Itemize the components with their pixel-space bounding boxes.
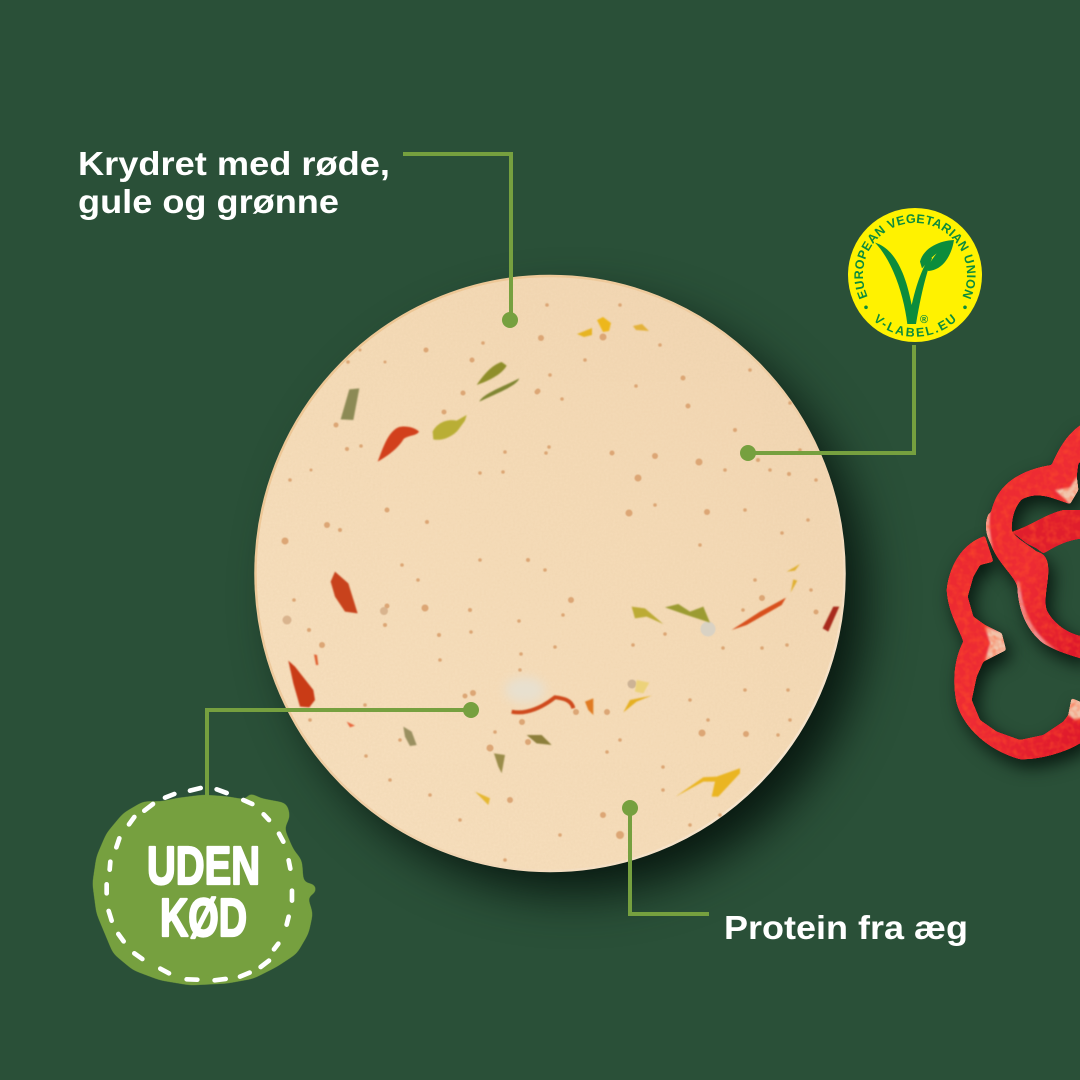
callout text: protein: Protein fra æg	[724, 909, 968, 946]
badge: V-label: ®	[920, 314, 928, 326]
leader dot: v-label	[740, 445, 756, 461]
callout text: spices	[78, 145, 390, 220]
green and red pieces, upper left	[341, 362, 519, 462]
pale blotch by red pepper	[505, 677, 545, 703]
leader dot: protein	[622, 800, 638, 816]
red bell pepper rings	[947, 423, 1080, 767]
badge: Uden kød: UDEN	[147, 836, 260, 896]
badge: Uden kød	[93, 788, 316, 985]
badge: V-label: EUROPEAN VEGETARIAN UNION	[854, 214, 976, 300]
leader line: uden kød	[207, 710, 471, 796]
badge: V-label: V-LABEL.EU	[876, 314, 956, 337]
infographic canvas	[80, 151, 1080, 986]
red and olive pieces, lower left	[288, 572, 417, 746]
pepper pieces on slice	[288, 317, 839, 805]
leader dot: spices	[502, 312, 518, 328]
product: round vegetarian cold-cut slice	[255, 275, 866, 893]
leader dot: uden kød	[463, 702, 479, 718]
leader line: protein	[630, 808, 709, 914]
front ring	[986, 423, 1080, 659]
callout text: spices: Krydret med røde,	[78, 145, 390, 182]
badge: Uden kød: KØD	[160, 888, 247, 948]
left ring	[947, 510, 1080, 759]
air holes	[282, 607, 716, 688]
leader line: spices	[403, 154, 511, 320]
pieces, lower right	[475, 564, 839, 805]
callout text: spices: gule og grønne	[78, 183, 339, 220]
yellow pieces, top	[577, 317, 649, 337]
badge: V-label	[848, 208, 982, 342]
leader line: v-label	[748, 345, 914, 453]
